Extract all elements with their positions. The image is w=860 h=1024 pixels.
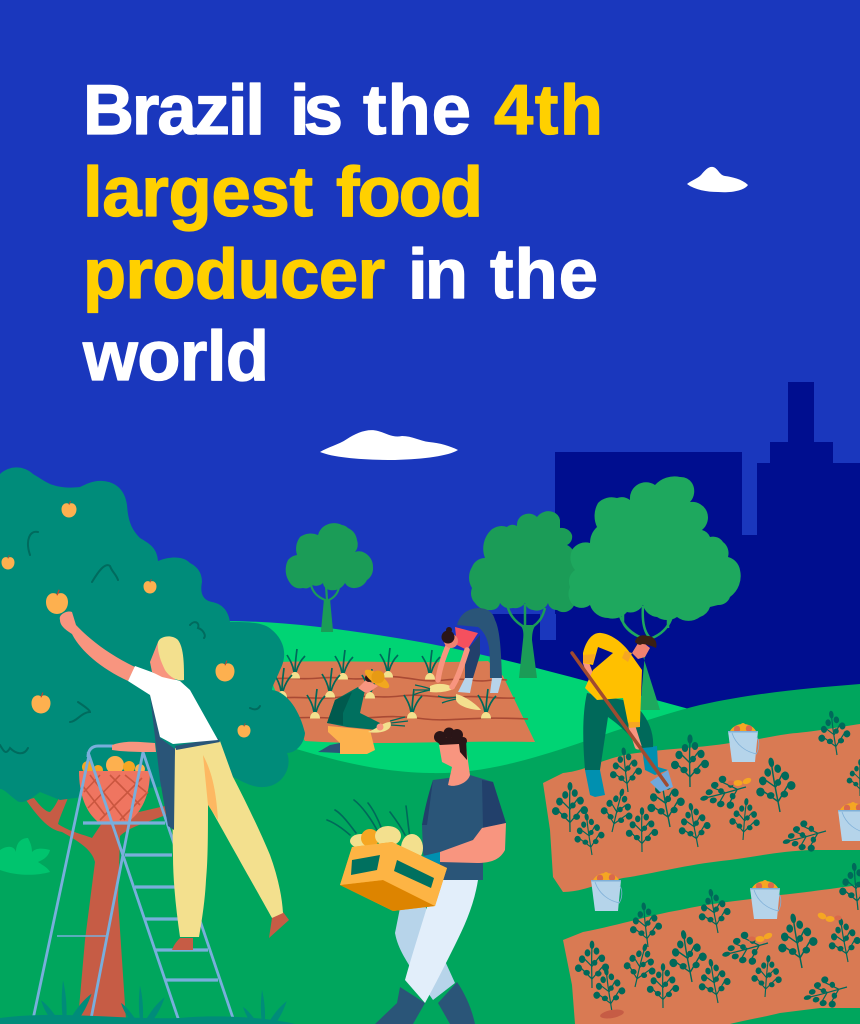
crate of vegetables bbox=[327, 800, 447, 911]
harvested potatoes bbox=[599, 777, 842, 1020]
man with shovel bbox=[572, 633, 673, 797]
front hill bbox=[0, 684, 860, 1024]
title bbox=[82, 70, 603, 395]
title: the bbox=[363, 70, 471, 149]
basket of apples bbox=[79, 756, 150, 822]
title: food bbox=[336, 152, 483, 231]
city skyline bbox=[490, 382, 860, 720]
ground bushes bbox=[0, 980, 295, 1024]
man picking apples bbox=[60, 611, 289, 950]
cloud: centre bbox=[320, 430, 458, 460]
cloud: upper right bbox=[687, 167, 748, 192]
big tree trunk bbox=[26, 790, 168, 1023]
title: world bbox=[82, 316, 269, 395]
vegetable bed: lower bbox=[563, 885, 860, 1024]
title: largest bbox=[83, 152, 313, 231]
title: is bbox=[290, 70, 343, 149]
buckets bbox=[591, 723, 860, 919]
plants: upper bed bbox=[552, 708, 860, 858]
crown leaf marks bbox=[0, 532, 260, 753]
title: Brazil bbox=[83, 70, 265, 149]
worker: kneeling with hat bbox=[318, 667, 408, 754]
man carrying crate bbox=[375, 728, 506, 1024]
tree: middle bbox=[469, 511, 579, 678]
worker: bending bbox=[438, 608, 502, 693]
vegetable bed: upper bbox=[543, 724, 860, 892]
bush: light green bbox=[0, 838, 50, 875]
big tree crown bbox=[0, 467, 305, 802]
title: 4th bbox=[494, 70, 603, 149]
small tree: far bbox=[286, 523, 373, 632]
title: in bbox=[408, 234, 468, 313]
title: producer bbox=[83, 234, 385, 313]
ladder bbox=[32, 746, 235, 1024]
field: onions bbox=[272, 648, 535, 743]
tree: right bbox=[568, 476, 741, 710]
apples bbox=[1, 501, 250, 738]
back hill bbox=[0, 621, 700, 800]
plants: lower bed bbox=[575, 861, 860, 1014]
title: the bbox=[490, 234, 598, 313]
